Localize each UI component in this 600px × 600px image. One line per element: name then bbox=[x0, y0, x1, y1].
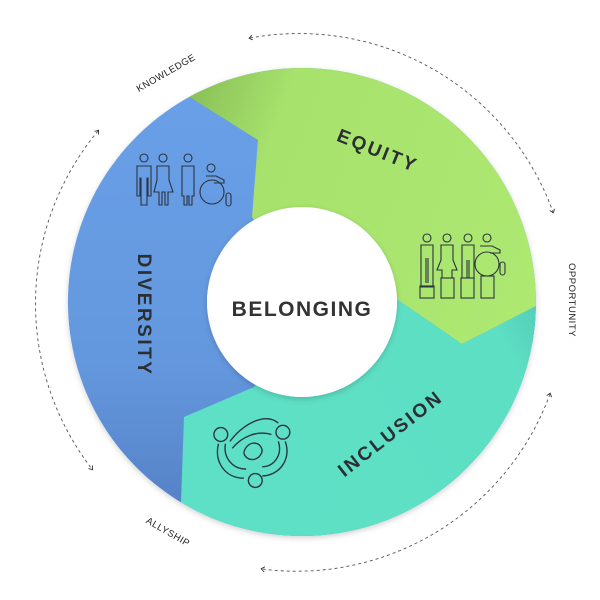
label: allyship: ALLYSHIP bbox=[144, 515, 192, 549]
panel: equity bbox=[189, 68, 536, 344]
panel: inclusion bbox=[181, 300, 536, 536]
label: inclusion: INCLUSION bbox=[334, 387, 447, 482]
center circle bbox=[207, 207, 397, 397]
label: equity: EQUITY bbox=[334, 126, 421, 177]
arrow: left dashed arc bbox=[36, 131, 98, 469]
icon: inclusion circle of people bbox=[214, 419, 290, 487]
icon: diversity people bbox=[137, 154, 231, 206]
label: opportunity: OPPORTUNITY bbox=[566, 263, 577, 337]
label: knowledge: KNOWLEDGE bbox=[135, 52, 198, 95]
arrow: right dashed arc bbox=[262, 394, 550, 571]
label: diversity: DIVERSITY bbox=[133, 254, 154, 376]
arrow: top dashed arc bbox=[250, 34, 553, 212]
heading: belonging: BELONGING bbox=[232, 298, 372, 321]
panel: diversity bbox=[68, 68, 536, 536]
ring shadow bbox=[68, 68, 536, 536]
icon: equity people on blocks bbox=[420, 234, 505, 298]
